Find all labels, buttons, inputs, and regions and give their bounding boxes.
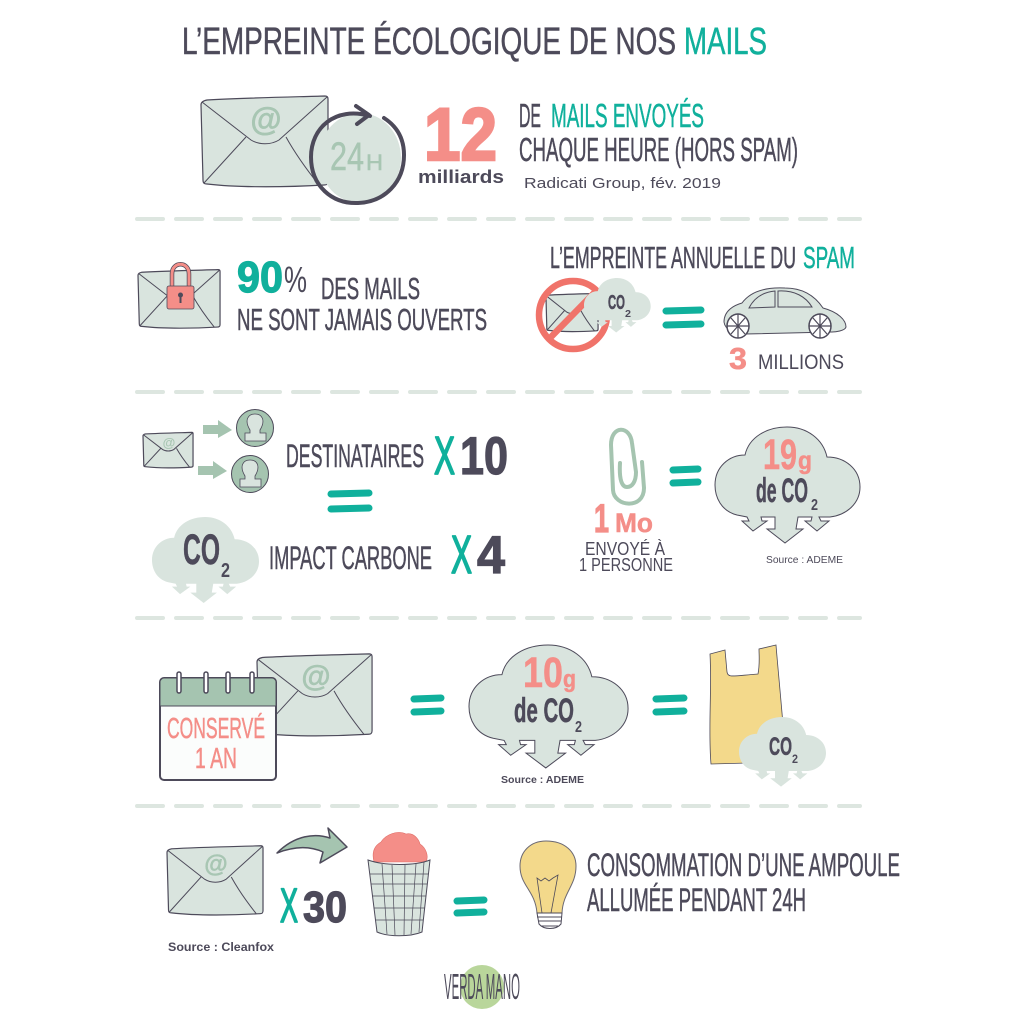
icon: paperclip [611,430,644,504]
icon: CO2 cloud: CO [183,526,220,574]
icon: CO2 cloud: 2 [625,309,631,320]
text: 1 Mo envoyé à 1 personne: Mo [615,508,653,538]
title: L’EMPREINTE ÉCOLOGIQUE DE NOS [182,20,676,63]
icon: curved arrow [277,828,347,863]
icon: plastic bag [710,645,786,764]
icon: envelope [257,654,372,736]
icon: envelope: @ [301,660,331,693]
equals sign [457,900,484,913]
equals sign [666,310,701,325]
text: 1 Mo envoyé à 1 personne: 1 [594,497,609,541]
icon: cloud 10 g: 2 [575,719,582,736]
text: 90% des mails ne sont jamais ouverts: DES MAILS [321,271,420,306]
icon: CO2 cloud: CO [608,292,625,314]
equals sign [673,469,698,483]
equals sign [414,698,441,712]
text: mails envoyés chaque heure: DE [519,97,541,134]
icon: CO2 cloud [739,717,826,787]
panel: conservé 1 an [160,645,826,787]
text: 90% des mails ne sont jamais ouverts: % [284,259,307,300]
icon: envelope with 24h cycle: 24 [330,135,364,179]
text: destinataires x10: 10 [460,427,508,486]
text: destinataires x10: DESTINATAIRES [286,438,424,474]
icon: envelope to two recipients: @ [163,435,175,450]
title: MAILS [684,21,767,63]
icon: barred envelope [539,281,607,349]
logo: Verda Mano [444,965,520,1009]
icon: envelope with 24h cycle: H [366,150,383,175]
text: mails envoyés chaque heure: Radicati Group, fév. 2019 [524,175,721,192]
text: impact carbone x4: X [451,525,472,585]
source: Source : ADEME [766,555,843,566]
icon: envelope: @ [204,851,228,878]
icon: calendar: CONSERVÉ [167,712,265,745]
text: 90% des mails ne sont jamais ouverts: 90 [237,253,283,302]
icon: CO2 cloud [152,517,259,603]
panel: empreinte annuelle du spam [539,240,855,376]
stat: 3 millions [729,341,844,376]
text: impact carbone x4: 4 [477,526,505,585]
text: consommation d'une ampoule [587,847,900,918]
icon: cloud 19 g: de CO [756,472,808,510]
icon: cloud 10 g: 10 [523,649,563,697]
panel: 1 Mo = 19 g de CO2 [579,427,860,575]
stat: x30 [280,880,347,933]
text: 90% des mails ne sont jamais ouverts [237,253,487,337]
icon: CO2 cloud [584,278,651,333]
icon: calendar: 1 AN [195,743,237,775]
text: mails envoyés chaque heure [519,97,798,192]
text: consommation d'une ampoule: ALLUMÉE PENDANT 24H [587,882,806,918]
panel: 90% des mails [138,253,487,337]
panel: destinataires et impact carbone [143,410,508,603]
icon: cloud 19 g: 19 [763,431,797,479]
icon: cloud 19 g: 2 [811,497,818,514]
text: VERDA MANO [444,966,520,1007]
icon: CO2 cloud: CO [769,733,792,761]
heading: SPAM [803,240,855,275]
icon: cloud 19 g: g [798,447,812,475]
text: 1 Mo envoyé à 1 personne: ENVOYÉ À [585,539,665,559]
icon: car [724,288,846,338]
icon: waste bin [368,832,430,936]
text: mails envoyés chaque heure: MAILS ENVOYÉS [551,97,704,134]
source: Source : ADEME [501,774,584,786]
stat: x30: X [280,880,298,933]
icon: envelope with 24h cycle [201,96,404,203]
icon: calendar [160,674,276,780]
stat: 3 millions: 3 [729,341,747,376]
heading: L’EMPREINTE ANNUELLE DU [550,240,796,275]
stat: 3 millions: MILLIONS [758,351,844,374]
source: Source : Cleanfox [168,942,275,954]
text: 90% des mails ne sont jamais ouverts: NE SONT JAMAIS OUVERTS [237,302,487,337]
icon: envelope with 24h cycle: @ [250,101,282,137]
icon: envelope to two recipients [143,410,274,492]
panel: 12 milliards de mails [201,93,798,203]
equals sign [331,493,369,509]
text: 1 Mo envoyé à 1 personne [579,497,673,575]
text: impact carbone x4 [269,525,505,585]
stat: 12 milliards: 12 [424,93,497,176]
text: destinataires x10 [286,426,508,486]
icon: locked envelope [138,264,220,328]
icon: envelope [167,846,263,915]
icon: light bulb [520,841,576,928]
text: destinataires x10: X [434,426,455,486]
stat: 12 milliards: milliards [418,167,504,187]
panel: 30 mails à la corbeille [167,828,900,954]
text: 1 Mo envoyé à 1 personne: 1 PERSONNE [579,555,673,575]
text: mails envoyés chaque heure: CHAQUE HEURE (HORS SPAM) [519,131,798,168]
stat: x30: 30 [303,883,347,932]
icon: cloud 10 g: g [563,666,576,693]
icon: cloud 19 g [715,427,860,543]
equals sign [656,698,684,712]
text: impact carbone x4: IMPACT CARBONE [269,540,432,576]
icon: CO2 cloud: 2 [792,752,798,766]
icon: cloud 10 g: de CO [514,692,574,730]
icon: cloud 10 g [469,645,628,768]
icon: CO2 cloud: 2 [221,560,230,582]
